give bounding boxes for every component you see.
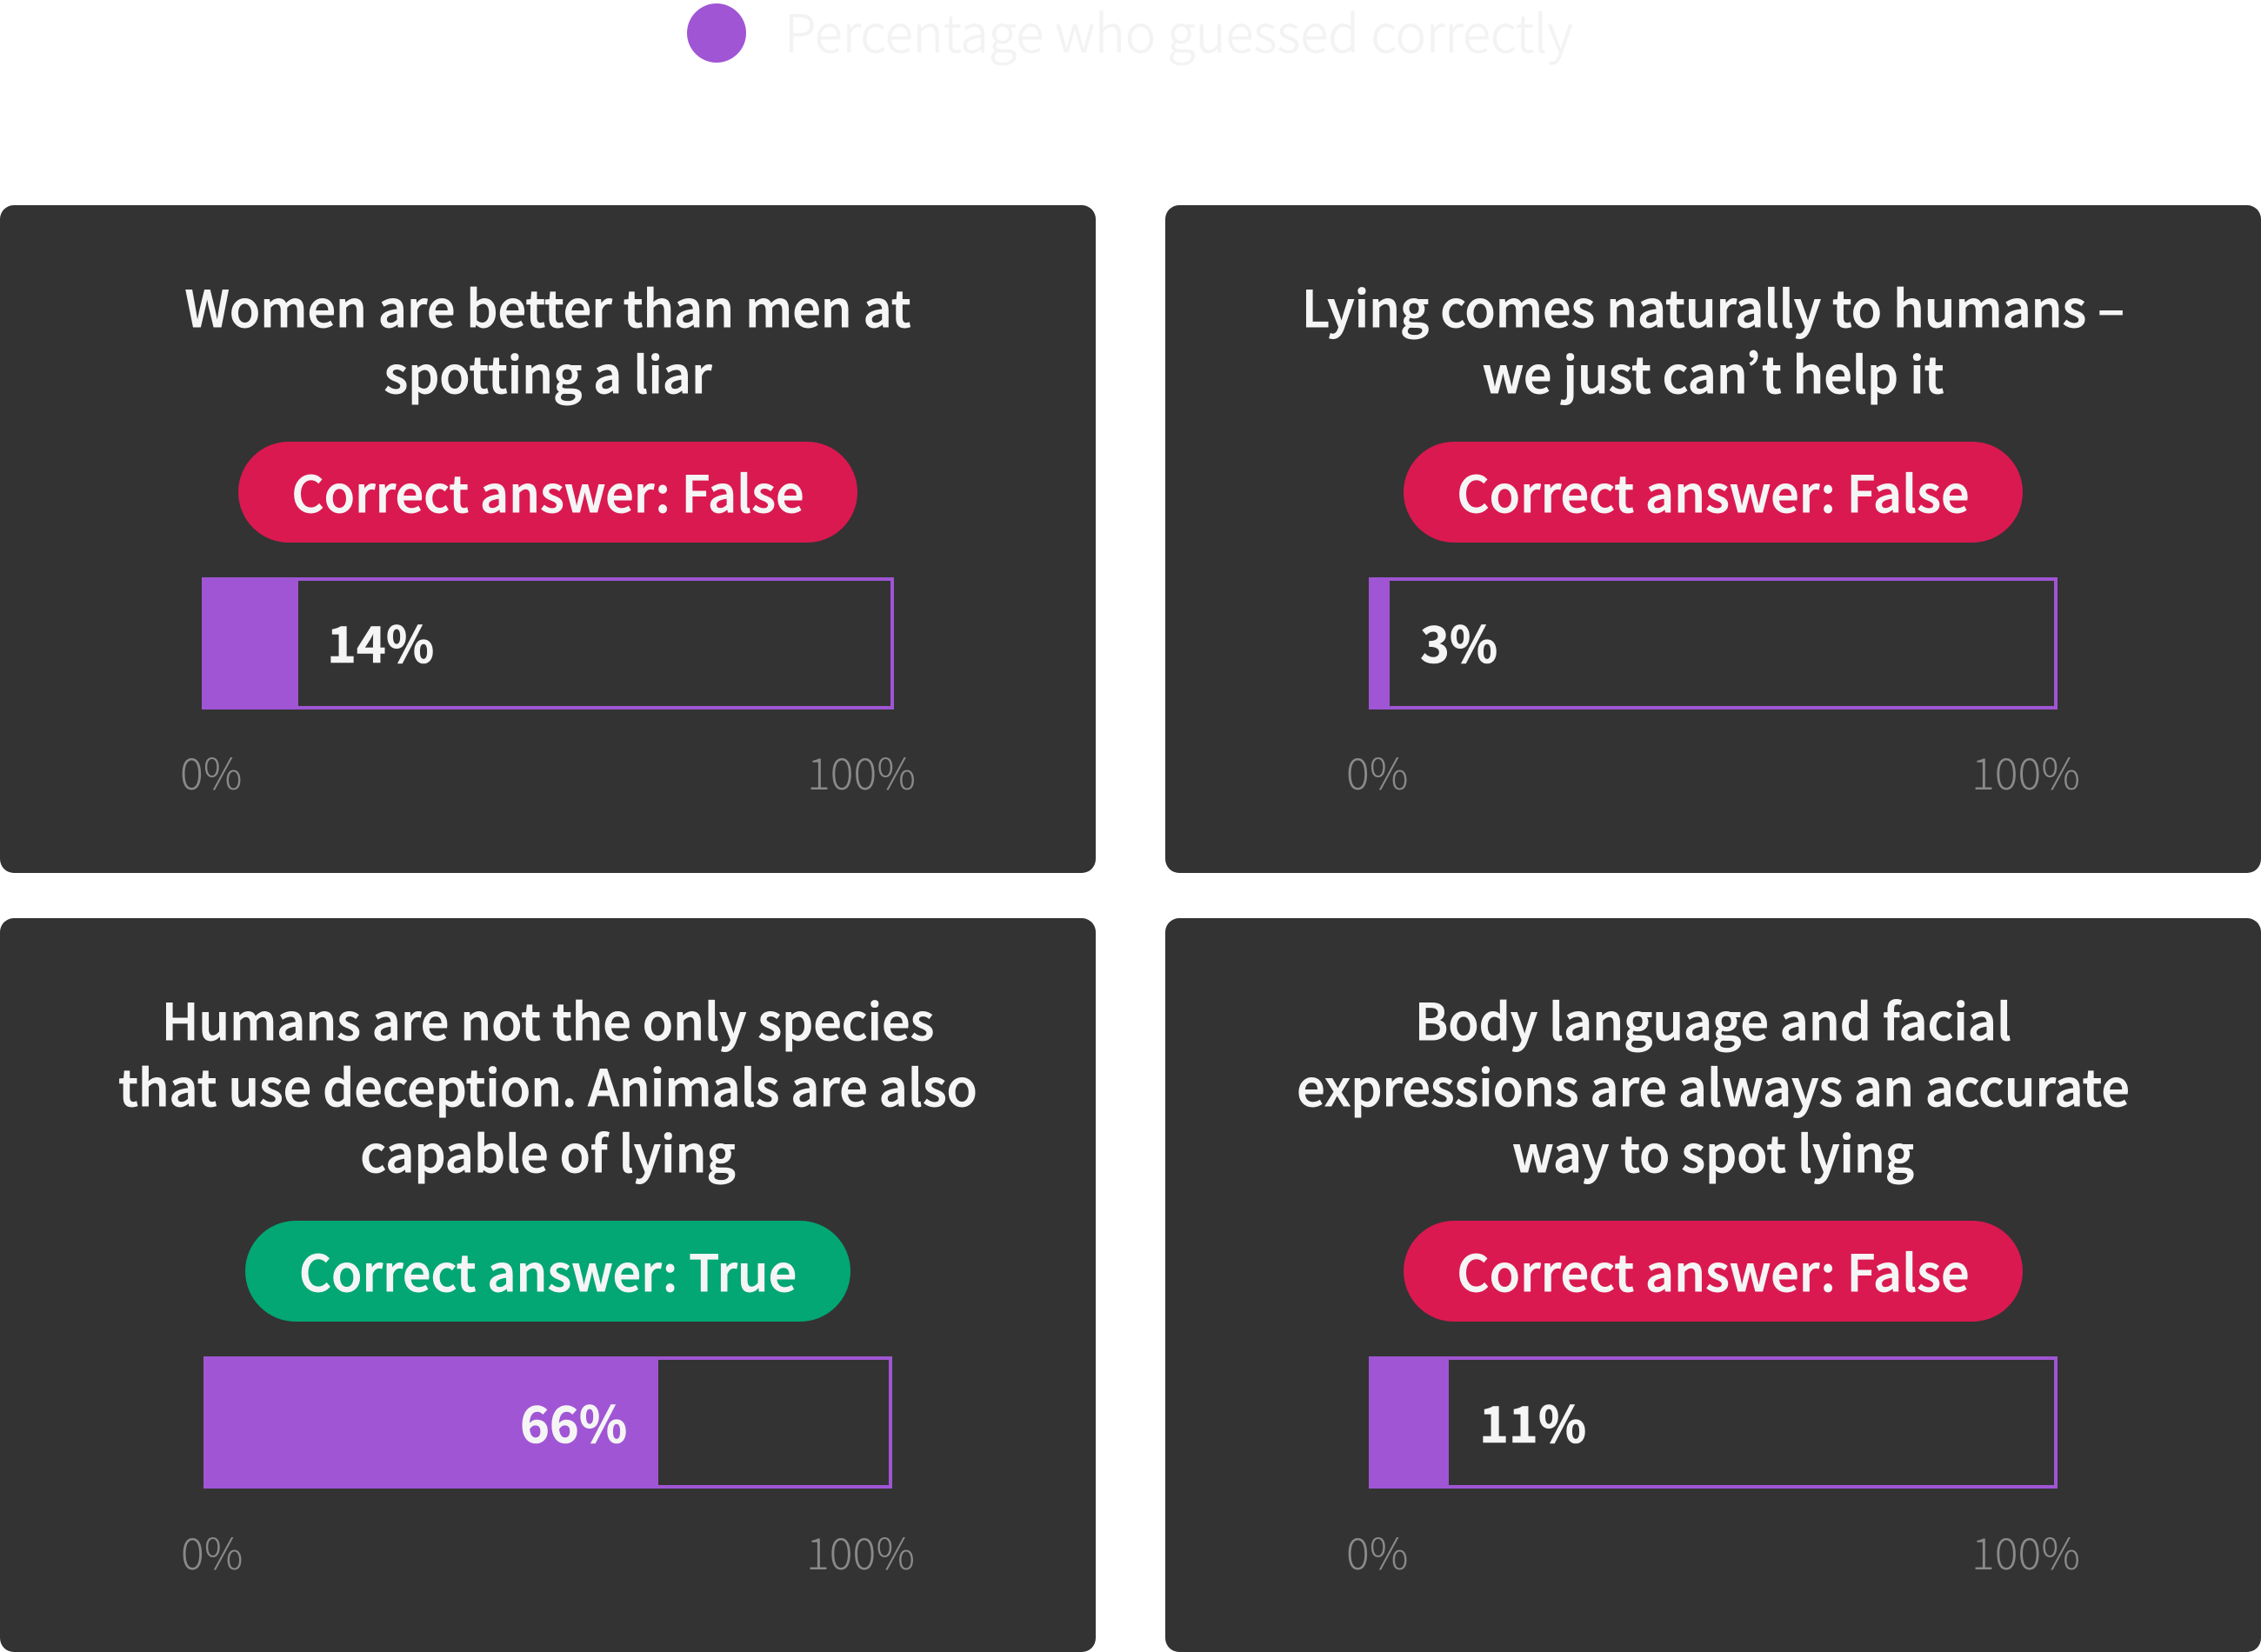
answer pill bbox=[238, 442, 857, 543]
bar fill 11% bbox=[1369, 1356, 1449, 1489]
axis end: 100% bbox=[806, 1520, 915, 1582]
axis start: 0% bbox=[180, 740, 243, 803]
bar track bbox=[1369, 1356, 2058, 1489]
answer pill: Correct answer: True bbox=[299, 1233, 797, 1306]
answer pill bbox=[1404, 1221, 2023, 1322]
question text: spotting a liar bbox=[384, 335, 712, 408]
question text bbox=[1302, 269, 2124, 408]
question text: Humans are not the only species bbox=[162, 982, 934, 1055]
panel: humans not the only species bbox=[0, 918, 1096, 1652]
axis end: 100% bbox=[807, 740, 916, 803]
answer pill: Correct answer: False bbox=[1457, 1233, 1970, 1306]
answer pill bbox=[245, 1221, 850, 1322]
panel: body language bbox=[1165, 918, 2261, 1652]
value: 14% bbox=[327, 604, 434, 677]
axis end: 100% bbox=[1971, 740, 2080, 803]
value: 11% bbox=[1479, 1384, 1586, 1457]
bar fill 14% bbox=[202, 577, 298, 709]
bar fill 66% bbox=[203, 1356, 658, 1489]
answer pill: Correct answer: False bbox=[1457, 454, 1970, 527]
question text: that use deception. Animals are also bbox=[118, 1048, 977, 1121]
question text: we just can’t help it bbox=[1483, 335, 1944, 408]
answer pill bbox=[1404, 442, 2023, 543]
question text bbox=[1297, 982, 2130, 1187]
legend bbox=[687, 0, 1573, 68]
question text: Body language and facial bbox=[1415, 982, 2011, 1055]
panel: women better at spotting a liar bbox=[0, 205, 1096, 873]
panel: lying comes naturally bbox=[1165, 205, 2261, 873]
axis end: 100% bbox=[1971, 1520, 2080, 1582]
bar track bbox=[203, 1356, 892, 1489]
question text: Lying comes naturally to humans – bbox=[1302, 269, 2124, 342]
question text bbox=[185, 269, 911, 408]
legend dot bbox=[687, 3, 746, 63]
value: 66% bbox=[520, 1384, 627, 1457]
question text: Women are better than men at bbox=[185, 269, 910, 342]
axis start: 0% bbox=[1346, 740, 1409, 803]
question text: way to spot lying bbox=[1512, 1114, 1914, 1187]
question text bbox=[118, 982, 977, 1187]
axis start: 0% bbox=[1346, 1520, 1409, 1582]
question text: capable of lying bbox=[360, 1114, 736, 1187]
value: 3% bbox=[1420, 604, 1497, 677]
bar track bbox=[1369, 577, 2058, 709]
axis start: 0% bbox=[181, 1520, 243, 1582]
answer pill: Correct answer: False bbox=[291, 454, 804, 527]
bar fill 3% bbox=[1369, 577, 1390, 709]
bar track bbox=[202, 577, 894, 709]
question text: expressions are always an accurate bbox=[1297, 1048, 2130, 1121]
